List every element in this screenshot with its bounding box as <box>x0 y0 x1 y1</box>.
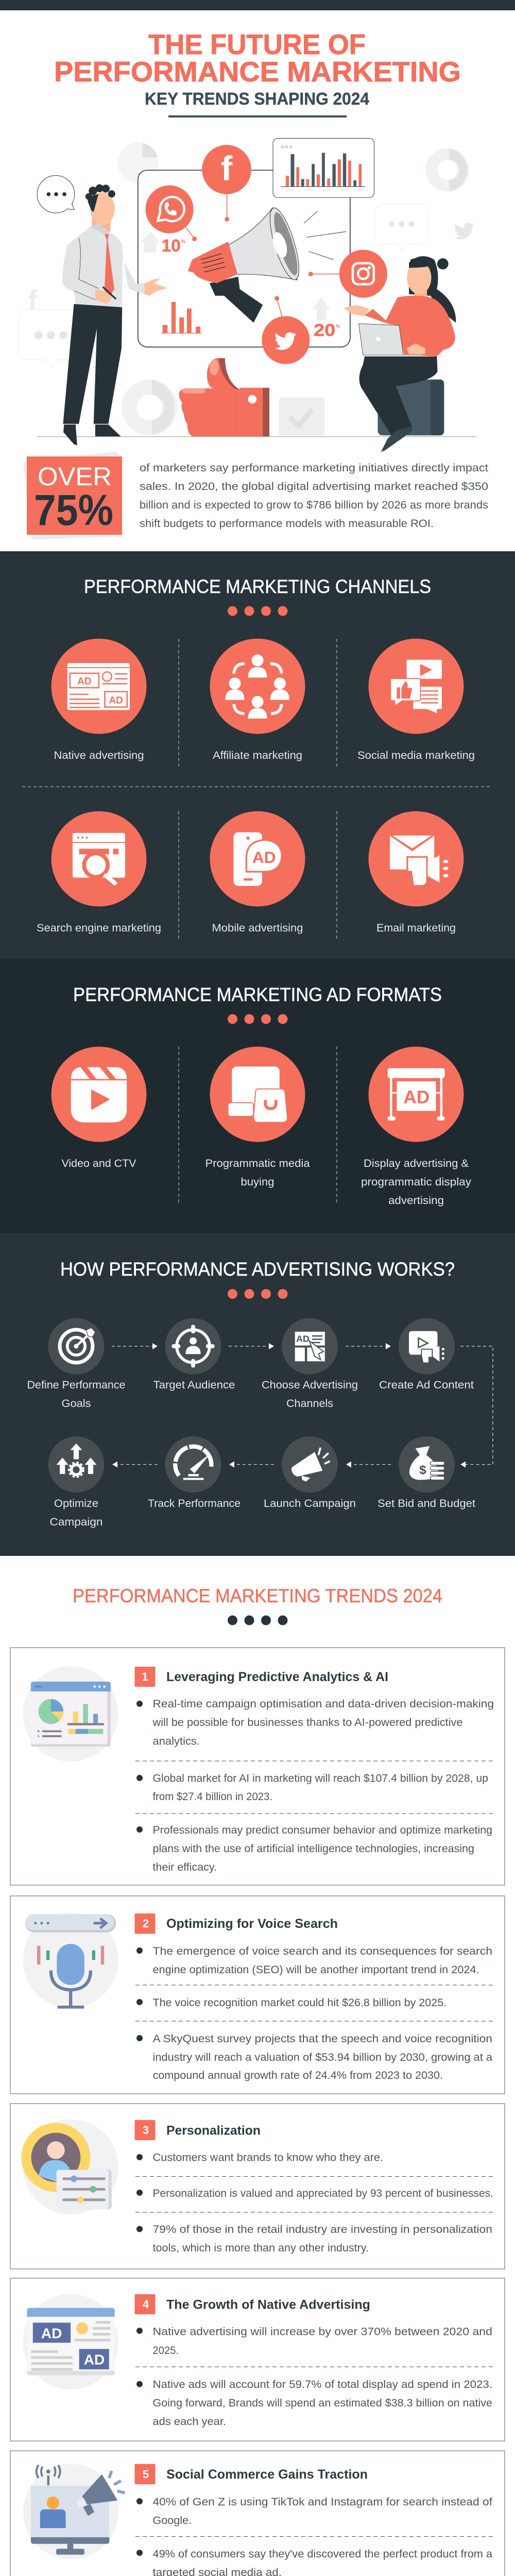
icon: create content <box>409 1331 444 1363</box>
icon: whatsapp <box>146 185 194 233</box>
icon: email marketing <box>390 836 449 886</box>
intro paragraph: billion and is expected to grow to $786 billion by 2026 as more brands <box>140 499 488 511</box>
icon: monitor megaphone <box>23 2464 125 2560</box>
step labels: Launch Campaign <box>264 1498 356 1510</box>
icon: affiliate <box>226 654 289 719</box>
bullets: A SkyQuest survey projects that the speech and voice recognition <box>152 2033 492 2045</box>
card 4: native advertising <box>10 2278 505 2441</box>
intro paragraph: sales. In 2020, the global digital advertising market reached $350 <box>140 481 488 493</box>
icon: native advertising <box>67 663 130 710</box>
stat labels: 20 <box>314 321 335 340</box>
thumbs up <box>179 358 269 436</box>
bullets: plans with the use of artificial intelligence technologies, increasing <box>152 1843 474 1855</box>
bullets: Native ads will account for 59.7% of total display ad spend in 2023. <box>152 2379 492 2391</box>
heading: HOW PERFORMANCE ADVERTISING WORKS? <box>60 1259 455 1280</box>
labels: programmatic display <box>361 1176 472 1188</box>
icon: target <box>60 1328 95 1363</box>
stat box: over 75% <box>23 451 123 539</box>
icon: mobile advertising <box>233 832 282 886</box>
labels: Email marketing <box>376 922 456 934</box>
title underline <box>168 115 347 117</box>
card heading: Leveraging Predictive Analytics & AI <box>166 1670 388 1684</box>
card heading: The Growth of Native Advertising <box>166 2298 370 2312</box>
stat labels: 10 <box>162 236 181 256</box>
circles <box>52 639 464 907</box>
bullets <box>135 2326 493 2428</box>
number badge <box>135 1913 156 1934</box>
bullets: Real-time campaign optimisation and data-driven decision-making <box>152 1698 494 1710</box>
board with connectors <box>138 170 350 347</box>
step labels: Create Ad Content <box>379 1379 474 1391</box>
step circles <box>48 1318 455 1493</box>
icon: native advertising: AD <box>77 676 92 687</box>
small bar chart <box>161 302 202 333</box>
icon: facebook <box>202 145 251 194</box>
icon: optimize <box>57 1444 97 1477</box>
labels <box>37 750 475 934</box>
heading: PERFORMANCE MARKETING CHANNELS <box>84 576 431 597</box>
icon: profile settings <box>21 2120 118 2214</box>
circles <box>52 1047 464 1142</box>
card heading: Social Commerce Gains Traction <box>166 2467 368 2482</box>
bullets: 79% of those in the retail industry are investing in personalization <box>152 2224 492 2235</box>
step labels: Target Audience <box>153 1379 235 1391</box>
icon: social media <box>390 660 442 713</box>
trends heading: PERFORMANCE MARKETING TRENDS 2024 <box>73 1585 442 1606</box>
bullets: ads each year. <box>152 2416 226 2428</box>
icon: choose channels <box>295 1332 325 1361</box>
labels: Display advertising & <box>364 1158 469 1170</box>
icon: dashboard <box>23 1666 118 1761</box>
ground line <box>37 436 477 437</box>
icon: native ads <box>23 2294 118 2389</box>
number badge: 5 <box>143 2468 149 2481</box>
bullets: Native advertising will increase by over 370% between 2020 and <box>152 2326 492 2338</box>
icon: choose channels: AD <box>296 1334 310 1344</box>
icon: money bag <box>409 1446 444 1480</box>
card heading: Personalization <box>166 2124 261 2138</box>
bar chart card <box>273 139 374 197</box>
icon: launch <box>291 1448 329 1482</box>
number badge <box>135 2294 156 2314</box>
number badge <box>135 2464 156 2484</box>
bullets: Global market for AI in marketing will reach $107.4 billion by 2028, up <box>152 1772 488 1785</box>
dots <box>228 606 287 616</box>
icon: speedometer <box>175 1447 211 1480</box>
icon: native ads: AD <box>84 2351 105 2367</box>
title block <box>54 28 461 108</box>
panel: how it works <box>0 1233 515 1556</box>
panel: ad formats <box>0 959 515 1233</box>
card 3: personalization <box>10 2104 505 2269</box>
title line 1: THE FUTURE OF <box>148 28 366 60</box>
bullets: analytics. <box>152 1735 200 1748</box>
bullets: 40% of Gen Z is using TikTok and Instagram for search instead of <box>152 2496 492 2508</box>
step labels <box>27 1379 475 1528</box>
bullets: industry will reach a valuation of $53.94 billion by 2030, growing at a <box>152 2052 492 2063</box>
number badge <box>135 1667 156 1687</box>
icon: native advertising: AD <box>109 695 123 706</box>
icon: money bag: $ <box>419 1463 426 1477</box>
bullets: will be possible for businesses thanks to AI-powered predictive <box>152 1717 462 1728</box>
labels <box>62 1158 472 1207</box>
labels: Video and CTV <box>62 1158 136 1170</box>
heading: PERFORMANCE MARKETING AD FORMATS <box>73 984 442 1005</box>
75 percent: 75% <box>34 486 113 534</box>
bullets <box>135 2496 493 2576</box>
icon: facebook: f <box>221 149 233 188</box>
step labels: Define Performance <box>27 1379 126 1391</box>
icon: instagram <box>339 250 387 298</box>
stat labels: % <box>181 239 185 244</box>
format icons <box>71 1066 445 1123</box>
number badge: 2 <box>143 1917 149 1930</box>
flow arrows <box>112 1343 493 1467</box>
step icons <box>57 1325 444 1482</box>
step labels: Channels <box>286 1398 333 1410</box>
icon: display: AD <box>403 1088 430 1108</box>
bullets: Professionals may predict consumer behavior and optimize marketing <box>152 1824 492 1836</box>
bullets: Google. <box>152 2515 192 2527</box>
icon: video <box>71 1066 127 1123</box>
icon: microphone <box>23 1912 118 2009</box>
bullets: compound annual growth rate of 24.4% from 2023 to 2030. <box>152 2070 443 2081</box>
bullets: 2025. <box>152 2345 179 2357</box>
bullets: The voice recognition market could hit $26.8 billion by 2025. <box>152 1997 447 2009</box>
icon: search engine <box>73 833 125 883</box>
bullets <box>135 2151 493 2254</box>
number badge <box>135 2120 156 2140</box>
bullets: their efficacy. <box>152 1861 217 1873</box>
card heading: Optimizing for Voice Search <box>166 1917 338 1931</box>
icon: audience target <box>172 1325 214 1367</box>
labels: Social media marketing <box>357 750 475 761</box>
step labels: Set Bid and Budget <box>377 1498 475 1510</box>
card 2: voice search <box>10 1896 505 2094</box>
subtitle: KEY TRENDS SHAPING 2024 <box>145 89 370 108</box>
icon: programmatic <box>228 1066 287 1123</box>
labels: advertising <box>388 1195 444 1207</box>
faded background shapes <box>18 142 474 436</box>
bullets: Customers want brands to know who they are. <box>152 2151 383 2164</box>
icon: display <box>388 1068 445 1121</box>
intro paragraph: shift budgets to performance models with measurable ROI. <box>140 518 434 530</box>
stat labels: % <box>336 324 340 329</box>
card 5: social commerce <box>10 2451 505 2576</box>
arrow stats behind board content <box>140 232 330 320</box>
number badge: 4 <box>143 2298 149 2311</box>
channel icons <box>67 654 449 886</box>
faded background shapes: f <box>28 285 38 316</box>
labels: Mobile advertising <box>212 922 303 934</box>
bullets: The emergence of voice search and its consequences for search <box>152 1945 492 1957</box>
panel: channels <box>0 551 515 959</box>
icon: twitter <box>262 316 310 364</box>
labels: buying <box>241 1176 274 1188</box>
stat labels <box>162 236 340 340</box>
step labels: Campaign <box>49 1516 103 1528</box>
step labels: Goals <box>62 1398 91 1410</box>
megaphone <box>188 205 346 323</box>
labels: Programmatic media <box>205 1158 310 1170</box>
labels: Affiliate marketing <box>213 750 302 761</box>
labels: Native advertising <box>54 750 144 761</box>
over: OVER <box>38 462 112 491</box>
card 1: predictive analytics <box>10 1648 505 1885</box>
bullets: from $27.4 billion in 2023. <box>152 1791 272 1803</box>
man presenter <box>62 184 167 445</box>
labels: Search engine marketing <box>37 922 161 934</box>
step labels: Track Performance <box>148 1498 241 1510</box>
trends dots <box>228 1616 287 1625</box>
step labels: Optimize <box>54 1498 98 1510</box>
intro paragraph <box>140 462 488 530</box>
bullets: 49% of consumers say they've discovered the perfect product from a <box>152 2548 492 2560</box>
step labels: Choose Advertising <box>262 1379 358 1391</box>
woman with laptop <box>344 256 456 452</box>
bullets: engine optimization (SEO) will be another important trend in 2024. <box>152 1964 479 1976</box>
bullets: Personalization is valued and appreciated by 93 percent of businesses. <box>152 2188 493 2199</box>
title line 2: PERFORMANCE MARKETING <box>54 56 461 88</box>
hero illustration <box>18 139 477 452</box>
bullets: tools, which is more than any other industry. <box>152 2242 369 2254</box>
top bar <box>0 0 515 10</box>
icon: mobile advertising: AD <box>252 848 276 867</box>
bullets <box>135 1698 494 1873</box>
dots <box>228 1289 287 1299</box>
dots <box>228 1014 287 1024</box>
icon: native ads: AD <box>41 2325 62 2341</box>
speech bubble <box>37 176 75 213</box>
bullets: Going forward, Brands will spend an estimated $38.3 billion on native <box>152 2397 492 2409</box>
intro paragraph: of marketers say performance marketing initiatives directly impact <box>140 462 488 474</box>
number badge: 3 <box>143 2124 149 2137</box>
bullets <box>135 1945 493 2081</box>
number badge: 1 <box>142 1670 148 1683</box>
